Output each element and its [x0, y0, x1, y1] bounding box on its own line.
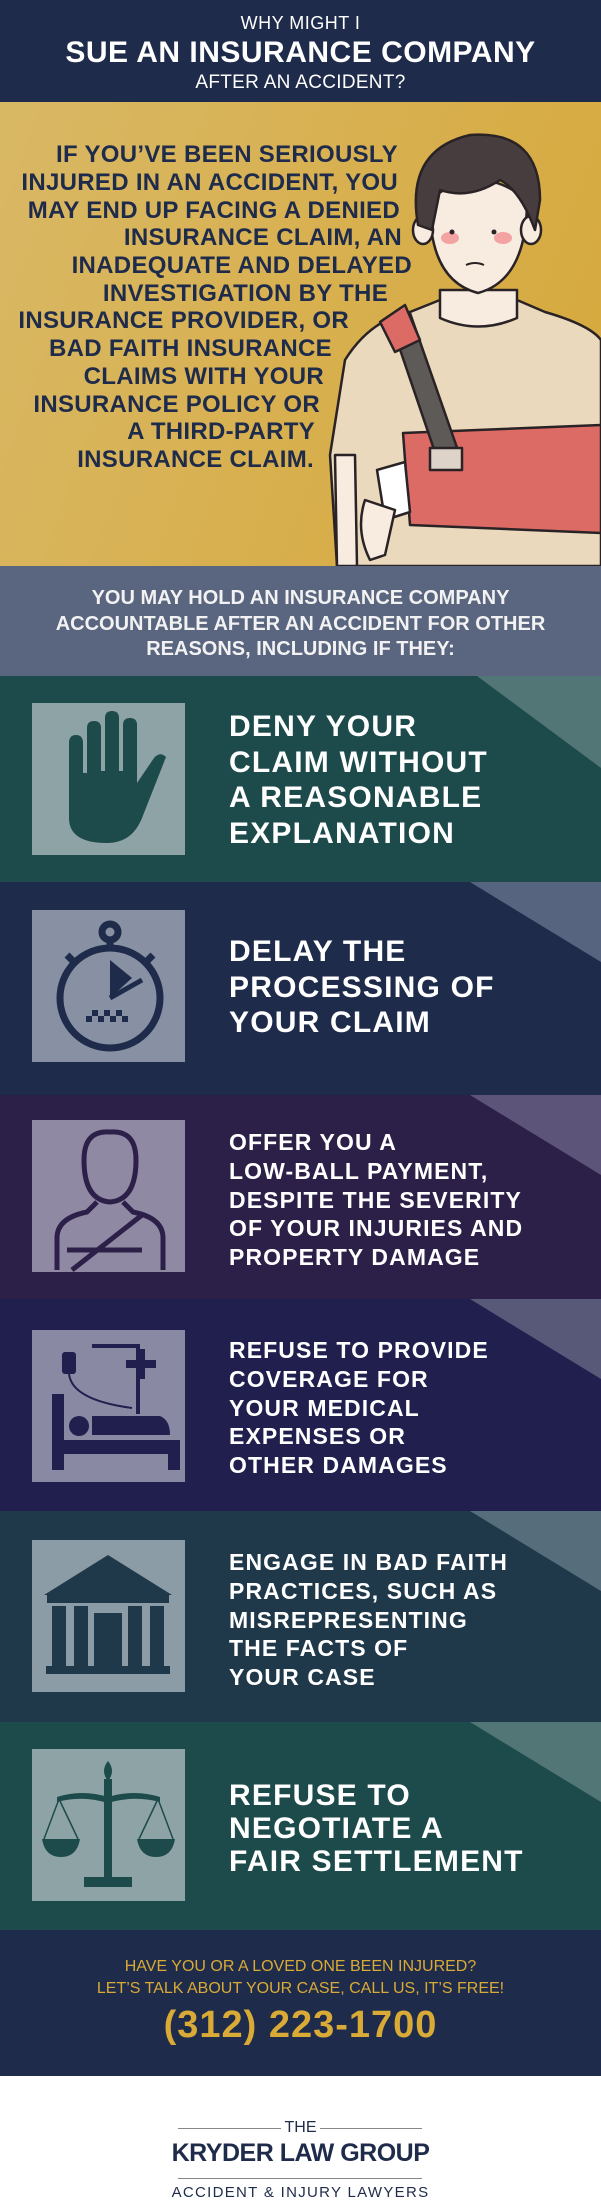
- text: OFFER YOU A: [229, 1129, 397, 1155]
- intro text: INADEQUATE AND DELAYED: [72, 252, 412, 279]
- text: REFUSE TO: [229, 1779, 411, 1812]
- text: DENY YOUR: [229, 710, 417, 743]
- panel: refuse negotiate: [0, 1722, 601, 1930]
- text: [229, 1129, 523, 1270]
- text: A REASONABLE: [229, 781, 482, 814]
- icon: hospital bed: [32, 1330, 185, 1482]
- intro text: INSURANCE CLAIM, AN: [124, 224, 402, 251]
- text: YOUR CLAIM: [229, 1006, 431, 1039]
- intro panel: [0, 102, 601, 566]
- intro text: BAD FAITH INSURANCE: [49, 335, 332, 362]
- subheading band: REASONS, INCLUDING IF THEY:: [146, 638, 455, 660]
- text: THE FACTS OF: [229, 1635, 408, 1661]
- intro text: INVESTIGATION BY THE: [103, 280, 388, 307]
- text: [229, 710, 488, 850]
- header line 3: AFTER AN ACCIDENT?: [195, 72, 406, 93]
- text: [229, 1337, 489, 1478]
- header line 1: WHY MIGHT I: [241, 13, 360, 33]
- text: LOW-BALL PAYMENT,: [229, 1158, 488, 1184]
- text: PROPERTY DAMAGE: [229, 1244, 480, 1270]
- panel: deny claim: [0, 676, 601, 882]
- intro text: INSURANCE CLAIM.: [77, 446, 314, 473]
- footer logo: [0, 2076, 601, 2211]
- text: DELAY THE: [229, 935, 407, 968]
- text: OTHER DAMAGES: [229, 1452, 448, 1478]
- footer logo: THE: [284, 2119, 316, 2136]
- text: OF YOUR INJURIES AND: [229, 1215, 523, 1241]
- text: ENGAGE IN BAD FAITH: [229, 1549, 508, 1575]
- intro text: INJURED IN AN ACCIDENT, YOU: [21, 169, 398, 196]
- illustration: injured man: [328, 133, 601, 566]
- panel: low-ball: [0, 1095, 601, 1299]
- panel: bad faith: [0, 1511, 601, 1722]
- text: PRACTICES, SUCH AS: [229, 1578, 497, 1604]
- text: MISREPRESENTING: [229, 1607, 468, 1633]
- intro text: MAY END UP FACING A DENIED: [28, 197, 400, 224]
- text: YOUR CASE: [229, 1664, 376, 1690]
- panel: refuse coverage: [0, 1299, 601, 1511]
- subheading band: ACCOUNTABLE AFTER AN ACCIDENT FOR OTHER: [56, 612, 545, 634]
- text: EXPENSES OR: [229, 1423, 406, 1449]
- text: NEGOTIATE A: [229, 1812, 444, 1845]
- text: EXPLANATION: [229, 817, 455, 850]
- footer logo: KRYDER LAW GROUP: [172, 2139, 429, 2167]
- phone: (312) 223-1700: [164, 2004, 437, 2046]
- header: [0, 0, 601, 102]
- text: COVERAGE FOR: [229, 1366, 429, 1392]
- icon: stopwatch: [32, 910, 185, 1062]
- text: REFUSE TO PROVIDE: [229, 1337, 489, 1363]
- intro text: A THIRD-PARTY: [127, 418, 315, 445]
- subheading band: YOU MAY HOLD AN INSURANCE COMPANY: [92, 587, 509, 609]
- call to action: HAVE YOU OR A LOVED ONE BEEN INJURED?: [125, 1958, 476, 1975]
- call to action: LET’S TALK ABOUT YOUR CASE, CALL US, IT’S FREE!: [97, 1980, 504, 1997]
- intro text: IF YOU’VE BEEN SERIOUSLY: [56, 141, 398, 168]
- text: PROCESSING OF: [229, 971, 495, 1004]
- icon: hand: [32, 703, 185, 855]
- text: [229, 1779, 524, 1878]
- intro text: [18, 141, 412, 473]
- text: [229, 935, 495, 1039]
- icon: injured person: [32, 1120, 185, 1272]
- intro text: INSURANCE POLICY OR: [33, 391, 320, 418]
- intro text: CLAIMS WITH YOUR: [84, 363, 324, 390]
- text: YOUR MEDICAL: [229, 1395, 420, 1421]
- text: FAIR SETTLEMENT: [229, 1845, 524, 1878]
- text: [229, 1549, 508, 1690]
- intro text: INSURANCE PROVIDER, OR: [18, 307, 349, 334]
- panel: delay: [0, 882, 601, 1095]
- footer logo: ACCIDENT & INJURY LAWYERS: [172, 2184, 429, 2201]
- text: DESPITE THE SEVERITY: [229, 1187, 522, 1213]
- call to action: [0, 1930, 601, 2076]
- icon: scales: [32, 1749, 185, 1901]
- title: SUE AN INSURANCE COMPANY: [65, 36, 536, 69]
- subheading band: [0, 566, 601, 676]
- text: CLAIM WITHOUT: [229, 746, 488, 779]
- icon: courthouse: [32, 1540, 185, 1692]
